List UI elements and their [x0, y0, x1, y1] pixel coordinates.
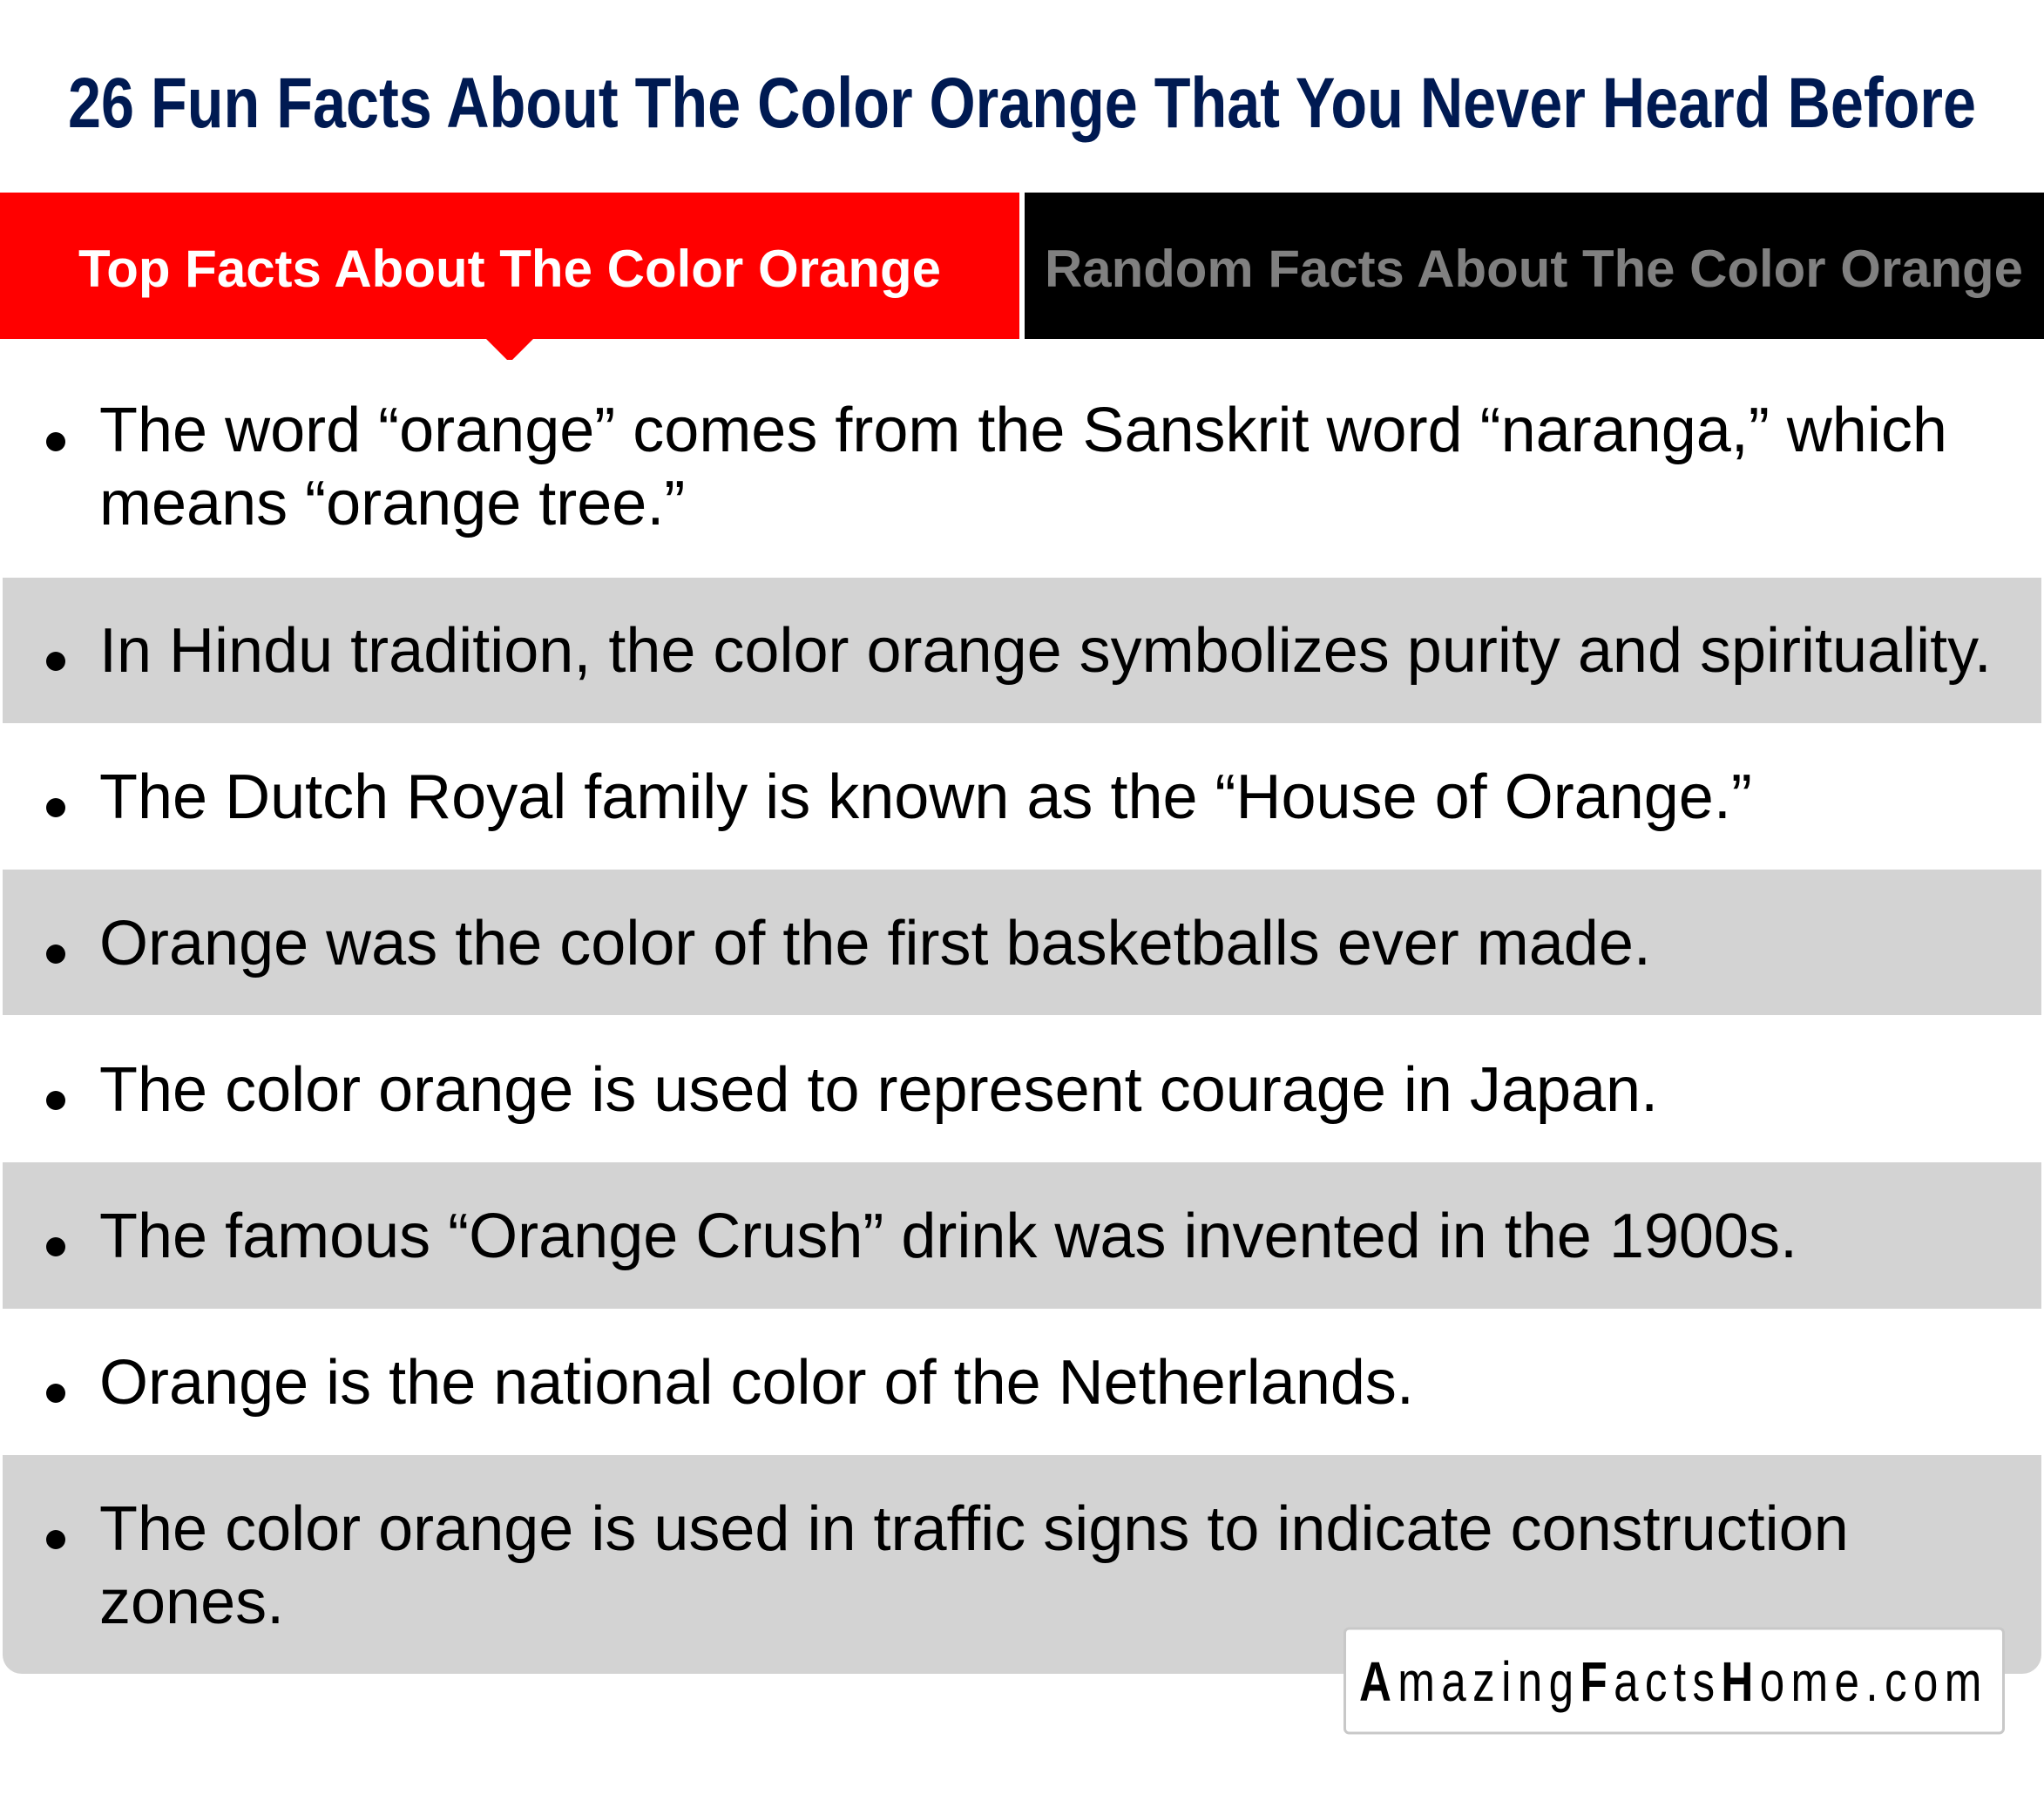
- fact 5: The color orange is used to represent courage in Japan.: [99, 1055, 1658, 1125]
- fact 2 row: In Hindu tradition, the color orange symbolizes purity and spirituality.: [99, 616, 1992, 686]
- fact 6 row: The famous “Orange Crush” drink was invented in the 1900s.: [99, 1202, 1797, 1271]
- watermark badge: [1345, 1628, 2004, 1733]
- fact 7: Orange is the national color of the Netherlands.: [99, 1348, 1414, 1418]
- fact 4 row: Orange was the color of the first basketballs ever made.: [99, 909, 1651, 978]
- fact 6 row: [3, 1162, 2041, 1309]
- tab: top facts (active): [0, 193, 1019, 360]
- fact 1: The word “orange” comes from the Sanskrit word “naranga,” which: [99, 396, 1947, 465]
- fact 3: The Dutch Royal family is known as the “House of Orange.”: [99, 762, 1752, 832]
- fact 1: [46, 396, 1947, 538]
- fact 2 row: [3, 578, 2041, 723]
- fact 8 row: zones.: [99, 1567, 284, 1637]
- tab: random facts (inactive): Random Facts About The Color Orange: [1045, 240, 2023, 298]
- fact 8 row: [3, 1455, 2041, 1674]
- fact 4 row: [3, 870, 2041, 1015]
- tab: top facts (active): Top Facts About The Color Orange: [78, 240, 941, 298]
- fact 8 row: The color orange is used in traffic signs to indicate construction: [99, 1494, 1849, 1564]
- watermark badge: AmazingFactsHome.com: [1359, 1652, 1981, 1713]
- tab: random facts (inactive): [1025, 193, 2044, 339]
- fact 1: means “orange tree.”: [99, 469, 685, 538]
